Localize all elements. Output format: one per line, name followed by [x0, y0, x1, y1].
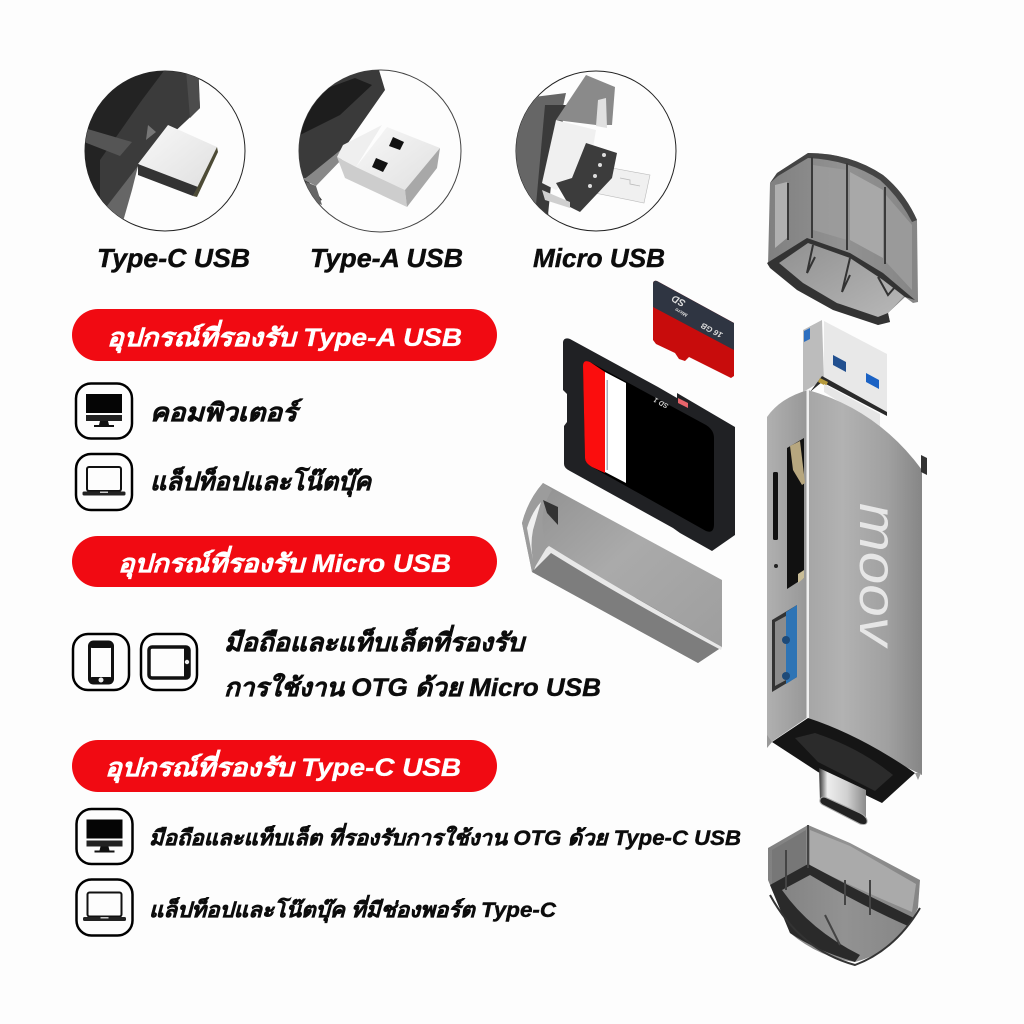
icon: desktop computer	[76, 384, 132, 438]
product: Type-C connector	[819, 768, 867, 824]
product: card reader body	[767, 390, 927, 803]
photo circle: Type-A plug	[295, 60, 461, 232]
connector: Type-A USB	[295, 60, 463, 273]
product: microSD card: Micro	[674, 306, 689, 318]
text: laptops with Type-C port: แล็ปท็อปและโน๊ตบุ๊ค ที่มีช่องพอร์ต Type-C	[149, 895, 557, 923]
heading pill: Type-A: อุปกรณ์ที่รองรับ Type-A USB	[107, 319, 462, 353]
text: phones and tablets line 1: มือถือและแท็บเล็ตที่รองรับ	[224, 624, 527, 657]
icon: desktop computer	[76, 809, 132, 864]
label: Type-C USB: Type-C USB	[97, 243, 250, 273]
product: microSD card: 16 GB	[699, 321, 724, 340]
text: phones and tablets with OTG: มือถือและแท็บเล็ต ที่รองรับการใช้งาน OTG ด้วย Type-C USB	[149, 823, 741, 850]
product: SD card adapter	[563, 338, 735, 551]
connector: Type-C USB	[80, 60, 250, 273]
logo: moov	[848, 503, 906, 649]
section: Type-C devices	[72, 740, 741, 936]
icon: laptop	[76, 454, 132, 510]
section: Micro USB devices	[72, 536, 601, 702]
product: Type-A plug on reader	[803, 320, 887, 428]
reset hole	[774, 564, 778, 568]
photo circle: Micro USB plug	[510, 71, 676, 240]
icon: laptop	[76, 880, 132, 936]
photo circle: Type-C plug	[84, 70, 246, 232]
heading pill: Micro USB: อุปกรณ์ที่รองรับ Micro USB	[118, 545, 451, 579]
connector: Micro USB	[510, 71, 676, 273]
label: Micro USB: Micro USB	[533, 243, 665, 273]
icon: tablet	[141, 634, 197, 690]
text: computer: คอมพิวเตอร์	[150, 398, 304, 427]
product: microSD card	[653, 281, 734, 378]
heading pill: Type-A	[72, 309, 497, 361]
USB port	[772, 605, 797, 692]
black end collar	[772, 718, 915, 803]
SD slot	[787, 438, 805, 589]
product: microSD card: SD	[670, 292, 688, 308]
product: bottom cap	[768, 825, 920, 965]
heading pill: Type-C	[72, 740, 497, 792]
text: phones and tablets line 2: การใช้งาน OTG ด้วย Micro USB	[224, 673, 601, 702]
icon: phone	[73, 634, 129, 690]
text: laptop and notebook: แล็ปท็อปและโน๊ตบุ๊ค	[150, 466, 372, 497]
product: USB flash drive	[522, 483, 722, 663]
body shell	[808, 390, 922, 775]
product: top cap	[767, 153, 918, 325]
section: Type-A devices	[72, 309, 497, 510]
microSD slot	[773, 472, 778, 540]
product: SD card adapter: SD 1	[653, 396, 670, 409]
heading pill: Micro USB	[72, 536, 497, 587]
heading pill: Type-C: อุปกรณ์ที่รองรับ Type-C USB	[105, 749, 461, 783]
label: Type-A USB: Type-A USB	[310, 243, 463, 273]
